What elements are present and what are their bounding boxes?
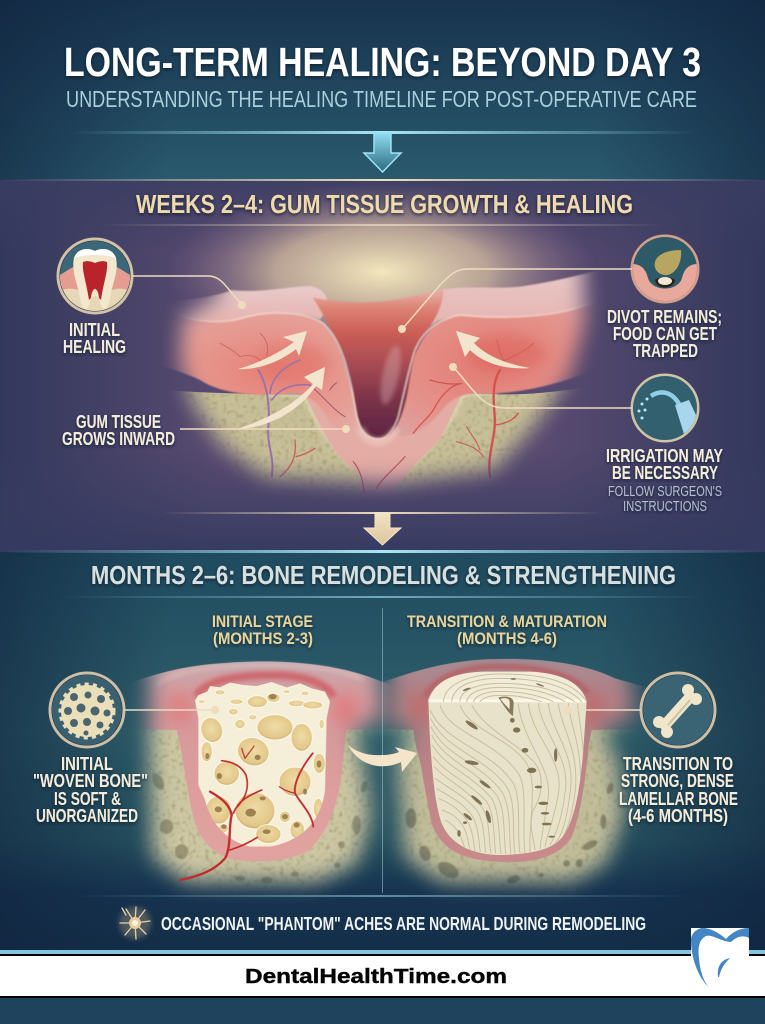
label: gum tissue grows inward: GROWS INWARD [62, 429, 175, 449]
label: lamellar bone [619, 754, 738, 826]
panel: header [0, 0, 765, 180]
subheading: initial stage: INITIAL STAGE [212, 612, 313, 631]
website name: DentalHealthTime.com [245, 966, 507, 988]
label: irrigation may be necessary: FOLLOW SURGEON'S [608, 483, 722, 500]
subheading: transition and maturation: (MONTHS 4-6) [457, 629, 557, 648]
label: woven bone: UNORGANIZED [36, 806, 138, 826]
panel: months 2-6 [0, 550, 765, 952]
label: woven bone: "WOVEN BONE" [33, 771, 148, 791]
label: woven bone [33, 754, 148, 826]
logo: tooth [691, 928, 749, 987]
icon: dense bone [641, 673, 715, 747]
section heading: weeks: WEEKS 2–4: GUM TISSUE GROWTH & HEALING [136, 189, 633, 219]
footer branding band [0, 928, 765, 1024]
connector: gum tissue [180, 425, 350, 433]
arrow: header to weeks section [364, 133, 401, 172]
connector: woven bone [124, 706, 219, 714]
label: gum tissue grows inward [62, 412, 175, 449]
gum: alveolar bone [174, 389, 576, 498]
icon: irrigation syringe [632, 375, 702, 441]
illustration: lamellar bone socket [352, 659, 668, 914]
label: divot remains: DIVOT REMAINS; [607, 307, 722, 327]
connector: dense bone [564, 706, 641, 714]
label: irrigation may be necessary: INSTRUCTIONS [623, 498, 707, 515]
gum cross-section illustration [165, 271, 600, 498]
subheading: initial stage [212, 612, 313, 648]
icon: nerve cell [119, 907, 151, 939]
label: woven bone: INITIAL [61, 754, 113, 774]
illustration: woven bone socket [133, 660, 393, 898]
subheading: initial stage: (MONTHS 2-3) [213, 629, 313, 648]
panel: weeks 2-4 [0, 179, 765, 552]
label: irrigation may be necessary [606, 446, 723, 515]
arrows: tissue growing inward [237, 331, 530, 429]
label: lamellar bone: TRANSITION TO [623, 754, 733, 774]
gum: blood vessels [220, 333, 533, 493]
label: divot remains [607, 307, 722, 361]
label: gum tissue grows inward: GUM TISSUE [76, 412, 161, 432]
icon: woven bone [50, 673, 124, 747]
arrow: weeks to months section [160, 512, 605, 545]
label: initial healing: HEALING [63, 337, 126, 357]
icon: tooth [58, 239, 132, 314]
connector: initial healing [132, 276, 246, 309]
label: initial healing: INITIAL [69, 320, 120, 340]
subheading: transition and maturation: TRANSITION & MATURATION [407, 612, 607, 631]
label: divot remains: FOOD CAN GET [613, 324, 717, 344]
connector: irrigation [449, 363, 632, 408]
gum: soft tissue [165, 271, 600, 492]
label: irrigation may be necessary: BE NECESSARY [612, 463, 718, 483]
label: lamellar bone: (4-6 MONTHS) [628, 806, 728, 826]
label: irrigation may be necessary: IRRIGATION MAY [606, 446, 723, 466]
arrow: woven to lamellar [348, 745, 417, 772]
icon: food in divot [632, 236, 698, 302]
connector: divot [398, 269, 632, 333]
subheading: transition and maturation [407, 612, 607, 648]
label: initial healing [63, 320, 126, 357]
label: divot remains: TRAPPED [633, 341, 698, 361]
label: woven bone: IS SOFT & [54, 789, 121, 809]
